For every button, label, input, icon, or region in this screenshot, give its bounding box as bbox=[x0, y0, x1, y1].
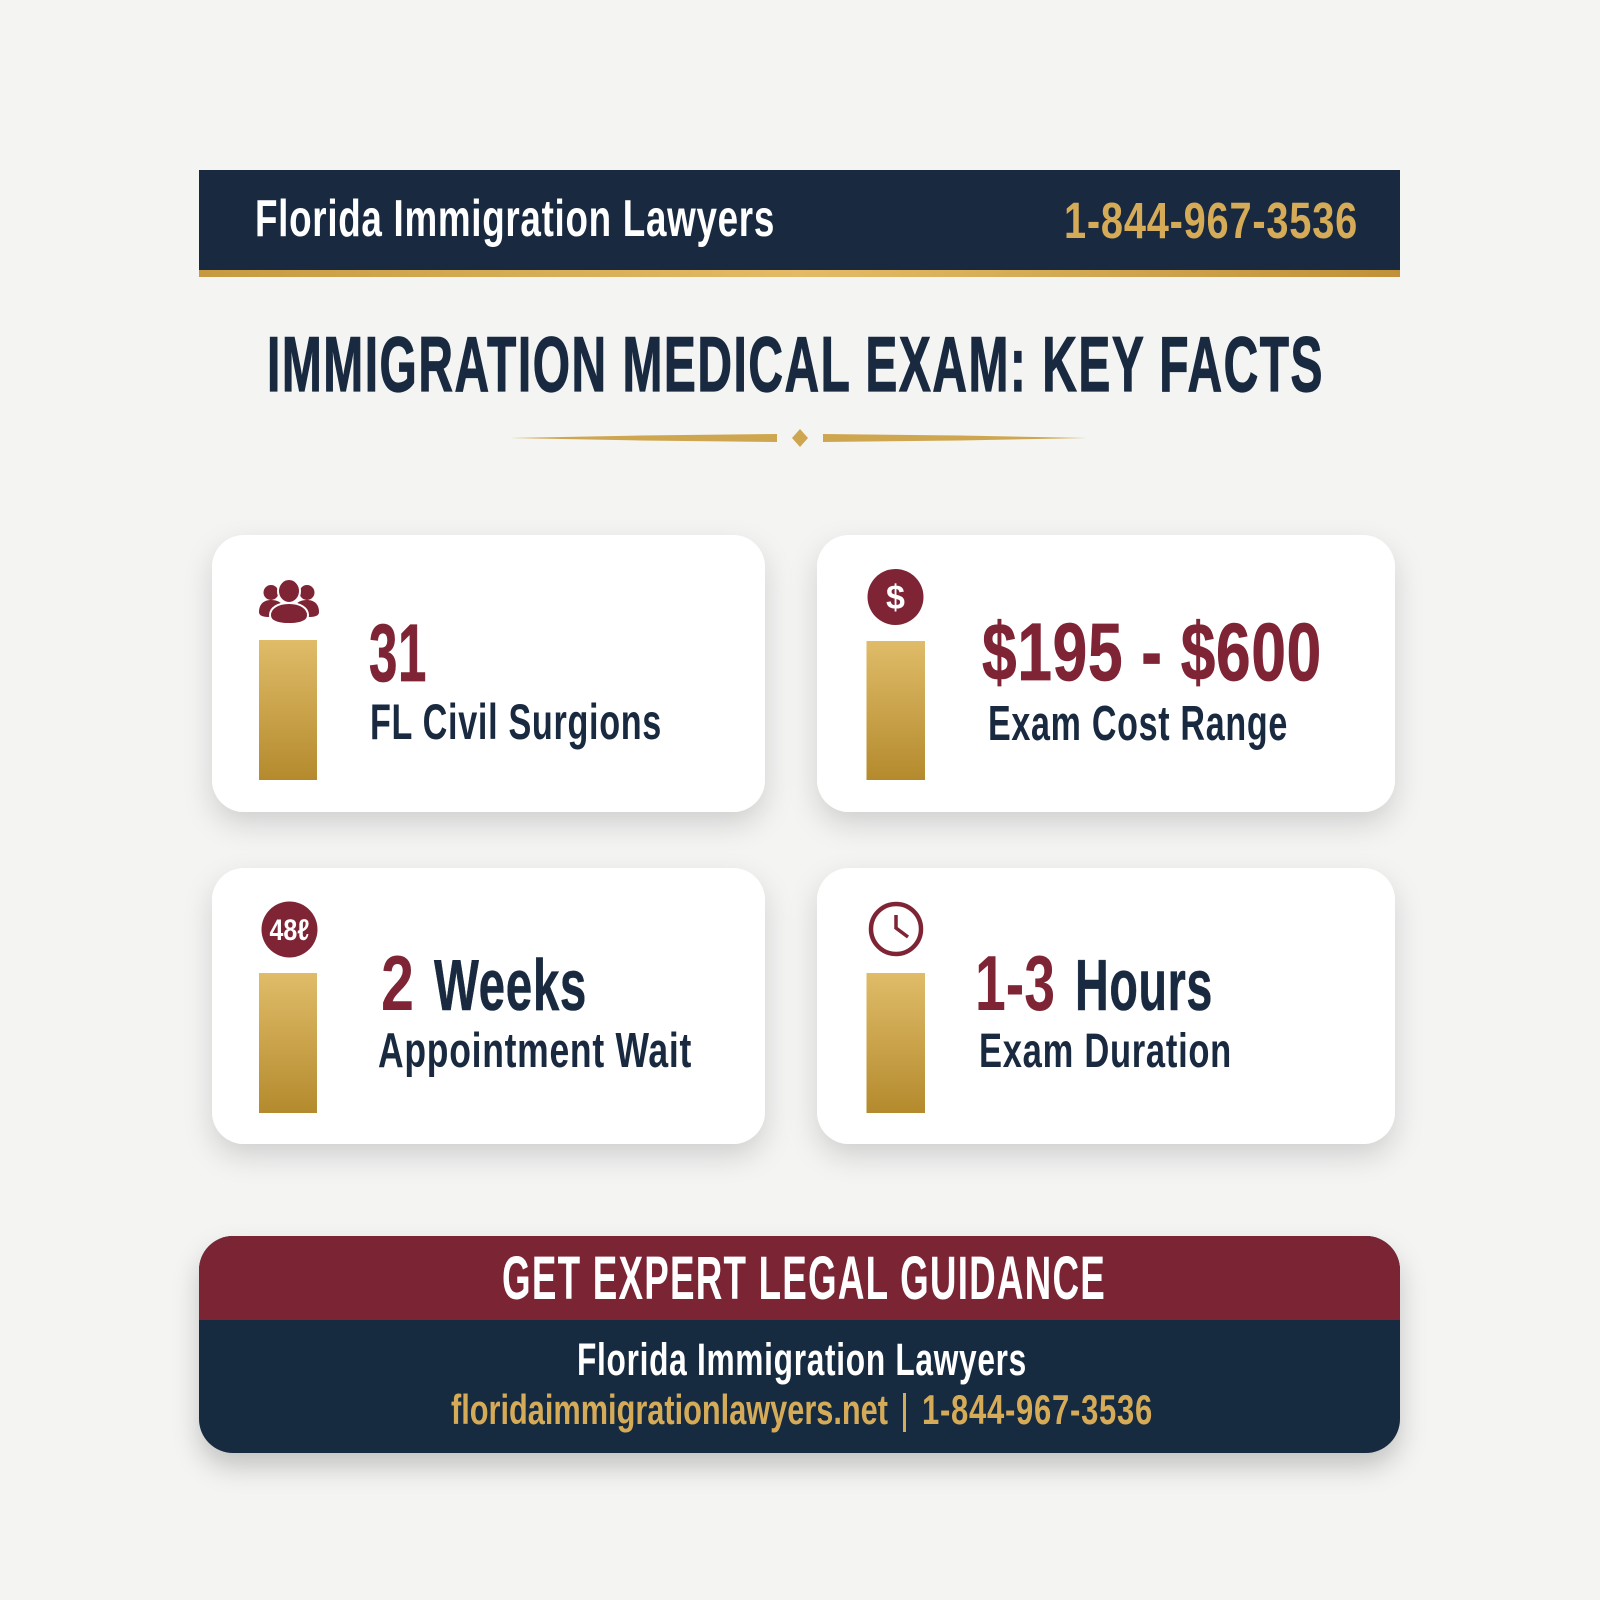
stat label: Appointment Wait bbox=[378, 1024, 692, 1078]
call to action heading: GET EXPERT LEGAL GUIDANCE bbox=[502, 1244, 1106, 1312]
card: appointment wait bbox=[212, 868, 765, 1144]
stat value unit: Hours bbox=[1075, 946, 1213, 1026]
stat label: Exam Duration bbox=[979, 1025, 1232, 1078]
icon: dollar coin bbox=[868, 569, 924, 625]
stat value: 31 bbox=[369, 608, 427, 699]
stat value: $195 - $600 bbox=[982, 607, 1322, 698]
gold bar bbox=[259, 640, 317, 780]
header firm name: Florida Immigration Lawyers bbox=[255, 190, 775, 248]
separator bbox=[903, 1393, 906, 1432]
phone number: 1-844-967-3536 bbox=[922, 1386, 1153, 1433]
icon: dollar coin: $ bbox=[886, 579, 905, 617]
stat value number: 1-3 bbox=[975, 939, 1055, 1027]
gold bar bbox=[259, 973, 317, 1113]
firm name: Florida Immigration Lawyers bbox=[577, 1334, 1027, 1385]
header phone number: 1-844-967-3536 bbox=[1064, 192, 1358, 249]
call to action panel bbox=[199, 1236, 1400, 1453]
card: exam duration bbox=[817, 868, 1395, 1144]
stat label: Exam Cost Range bbox=[988, 697, 1288, 751]
title divider bbox=[510, 429, 1087, 447]
header banner bbox=[199, 170, 1400, 277]
stat label: FL Civil Surgions bbox=[370, 694, 662, 750]
icon: people group bbox=[259, 579, 319, 624]
card: exam cost bbox=[817, 535, 1395, 812]
website: floridaimmigrationlawyers.net bbox=[451, 1386, 888, 1433]
icon: 48 hour badge: 48ℓ bbox=[270, 914, 310, 947]
icon: clock bbox=[871, 904, 921, 954]
gold bar bbox=[866, 973, 925, 1113]
icon: 48 hour badge bbox=[262, 902, 318, 958]
stat value unit: Weeks bbox=[434, 946, 587, 1026]
card: civil surgeons bbox=[212, 535, 765, 812]
gold bar bbox=[866, 641, 925, 780]
stat value number: 2 bbox=[381, 939, 414, 1027]
